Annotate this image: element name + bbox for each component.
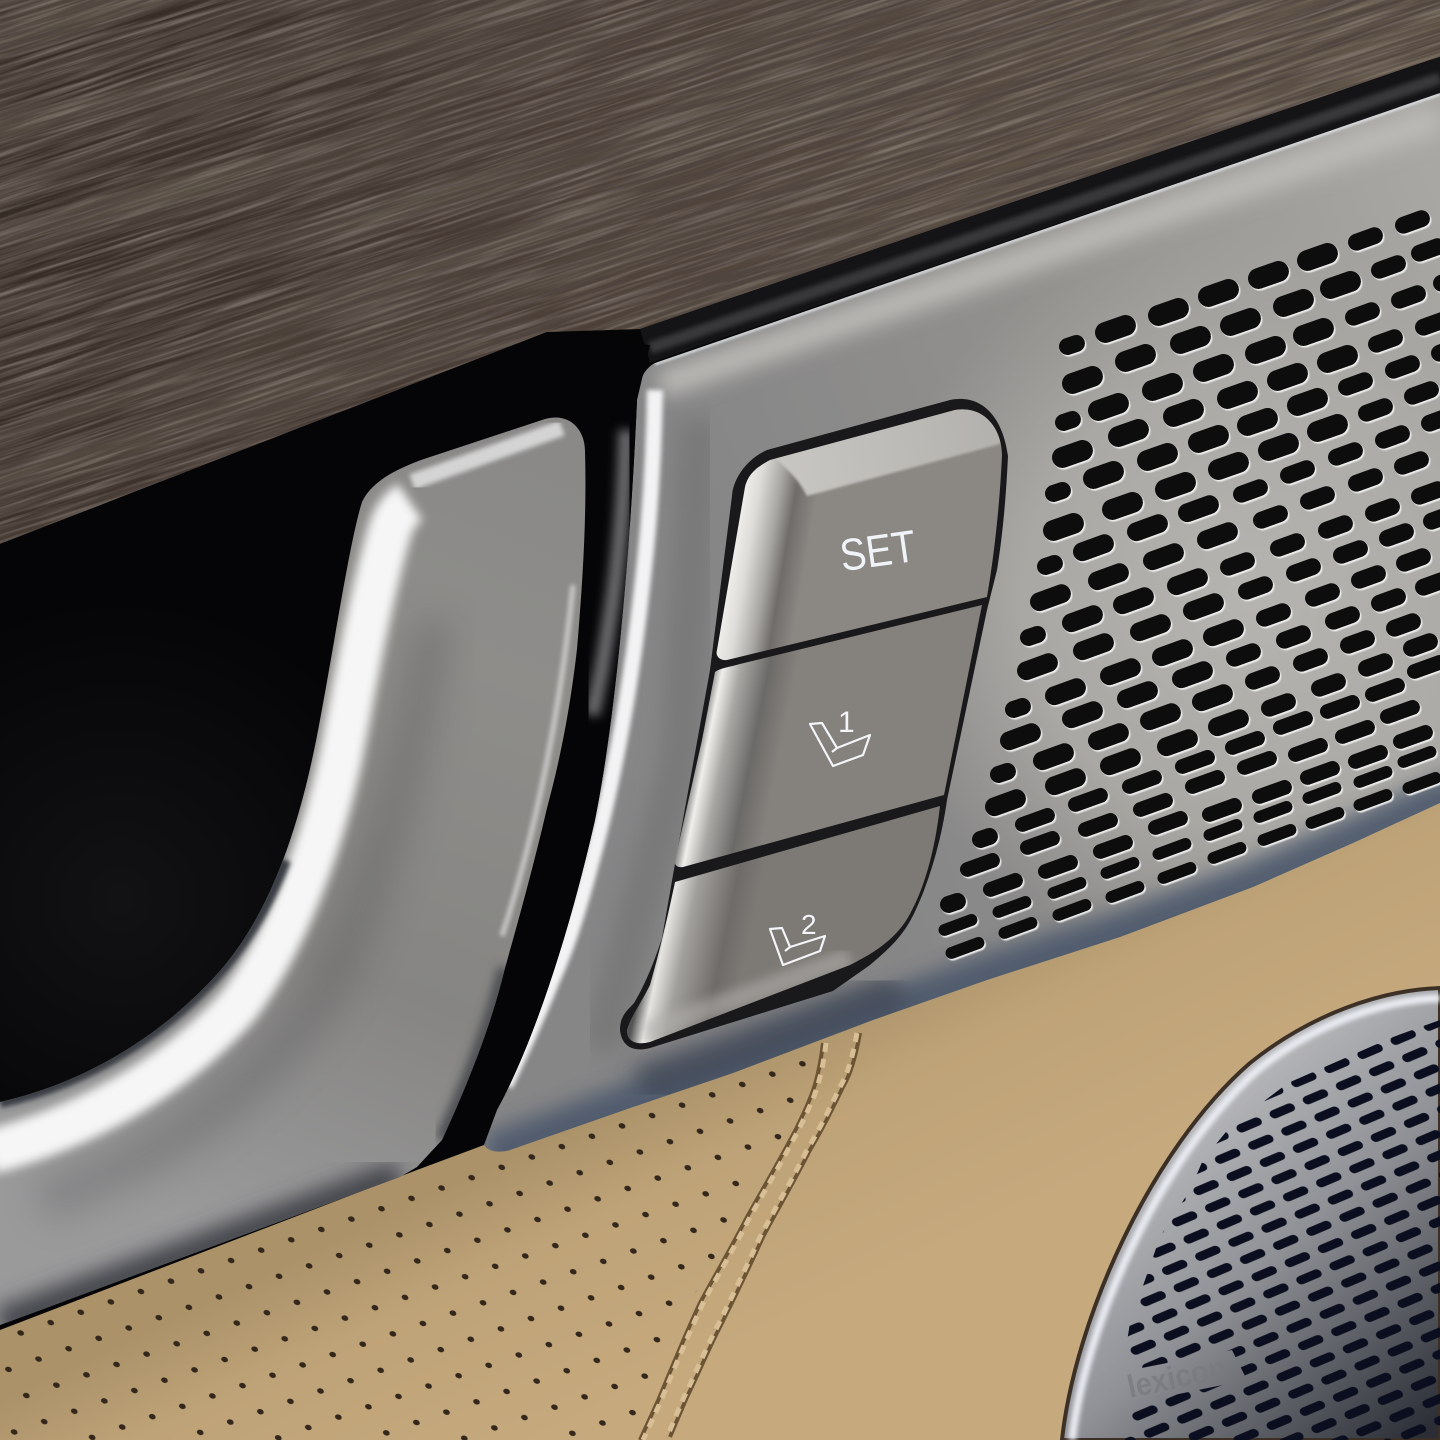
label 1: 1 [838, 706, 855, 739]
panel darker band by buttons [600, 420, 700, 1050]
handle bottom shading [0, 1177, 400, 1325]
SET button top bevel [774, 409, 1001, 497]
bottom slit holes [944, 752, 1436, 953]
grille area glow [956, 307, 1440, 895]
panel top edge light [655, 94, 1440, 364]
middle holes [994, 505, 1240, 807]
handle right lower dark edge [442, 968, 505, 1140]
leather stitching seam right [667, 1033, 860, 1437]
handle inner bright highlight [0, 502, 410, 1152]
speaker rim highlight [1072, 998, 1440, 1440]
leather stitching seam left [640, 1043, 826, 1440]
memory 2 button [627, 806, 940, 1043]
memory 1 button [675, 605, 982, 867]
panel top bevel glow [660, 118, 1440, 385]
short edge holes [948, 344, 1076, 904]
handle shadow beside highlight [40, 620, 435, 1200]
SET label: SET [837, 520, 919, 581]
panel lower blue shading [490, 795, 1440, 1160]
right side holes [1228, 219, 1440, 708]
memory buttons group [620, 399, 1010, 1049]
handle top face highlight [412, 428, 562, 482]
leather door trim [0, 760, 1440, 1440]
seat icon 1 [810, 723, 870, 766]
lower slim holes [968, 662, 1440, 890]
silver speaker panel [483, 93, 1440, 1160]
button housing [620, 399, 1008, 1049]
button 2 lower sheen [645, 958, 850, 1032]
speaker holes [1122, 1020, 1440, 1440]
panel shade under buttons [640, 990, 900, 1085]
SET button [717, 400, 1010, 660]
handle right edge highlight [502, 585, 573, 936]
recess inner reflection [592, 430, 626, 715]
seat icon 2 [770, 928, 825, 965]
round speaker cover [1062, 988, 1440, 1440]
speaker grille perforations [944, 219, 1440, 953]
door pull recess [0, 332, 650, 1330]
label 2: 2 [801, 909, 817, 940]
perforated leather insert [4, 1032, 862, 1440]
handle inner dark edge [0, 860, 285, 1102]
dark gap below wood [640, 57, 1440, 363]
panel left bright stripe [505, 390, 655, 1085]
door pull handle [0, 417, 585, 1325]
large holes [1054, 254, 1350, 530]
wood veneer [0, 0, 1440, 544]
embossed speaker logo: lexicon [1124, 1349, 1229, 1405]
